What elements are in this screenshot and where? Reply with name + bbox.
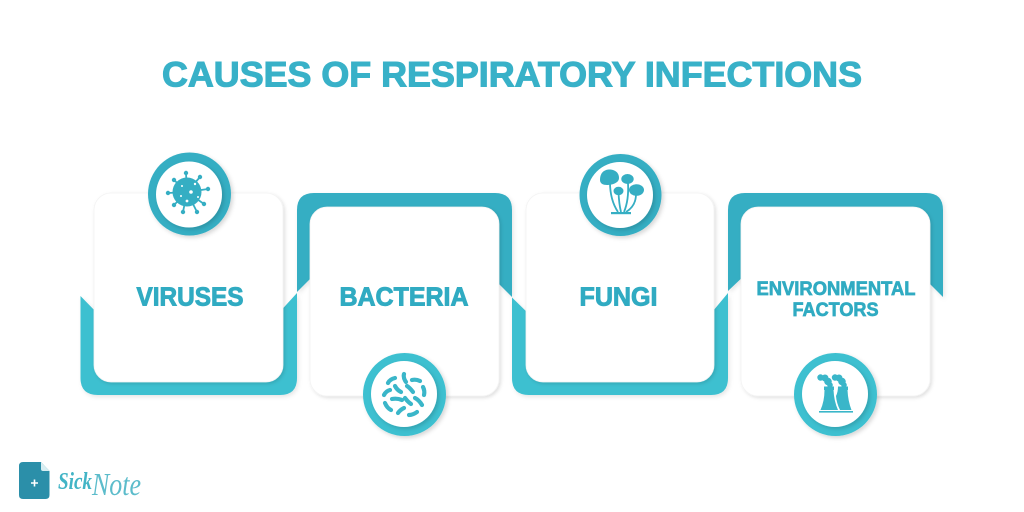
icon: cooling towers	[794, 353, 877, 436]
card: fungi	[526, 193, 714, 382]
logo wordmark: Sick	[58, 469, 92, 495]
card ribbon: viruses	[80, 293, 297, 395]
card: bacteria	[310, 207, 499, 396]
card ribbon: fungi	[512, 293, 728, 395]
label: environmental factors	[756, 279, 916, 321]
panel: bacteria	[297, 193, 512, 436]
card: viruses	[94, 193, 283, 382]
label: environmental factors: ENVIRONMENTAL	[756, 279, 916, 300]
label: environmental factors: FACTORS	[792, 300, 878, 321]
logo wordmark: Note	[91, 466, 141, 502]
logo: SickNote	[19, 462, 141, 502]
label: bacteria: BACTERIA	[340, 284, 468, 312]
card: environmental factors	[741, 207, 930, 396]
panel: environmental factors	[728, 193, 943, 436]
icon: fungi	[580, 154, 662, 236]
title: CAUSES OF RESPIRATORY INFECTIONS	[162, 54, 862, 94]
label: viruses: VIRUSES	[136, 284, 244, 312]
icon: virus	[148, 152, 231, 236]
card ribbon: bacteria	[297, 193, 512, 297]
logo wordmark	[58, 466, 141, 502]
icon: bacteria	[363, 353, 446, 436]
panel: viruses	[80, 152, 297, 395]
icon: document with plus	[19, 462, 50, 499]
card ribbon: environmental factors	[728, 193, 943, 297]
panel: fungi	[512, 154, 728, 395]
label: fungi: FUNGI	[580, 284, 658, 312]
